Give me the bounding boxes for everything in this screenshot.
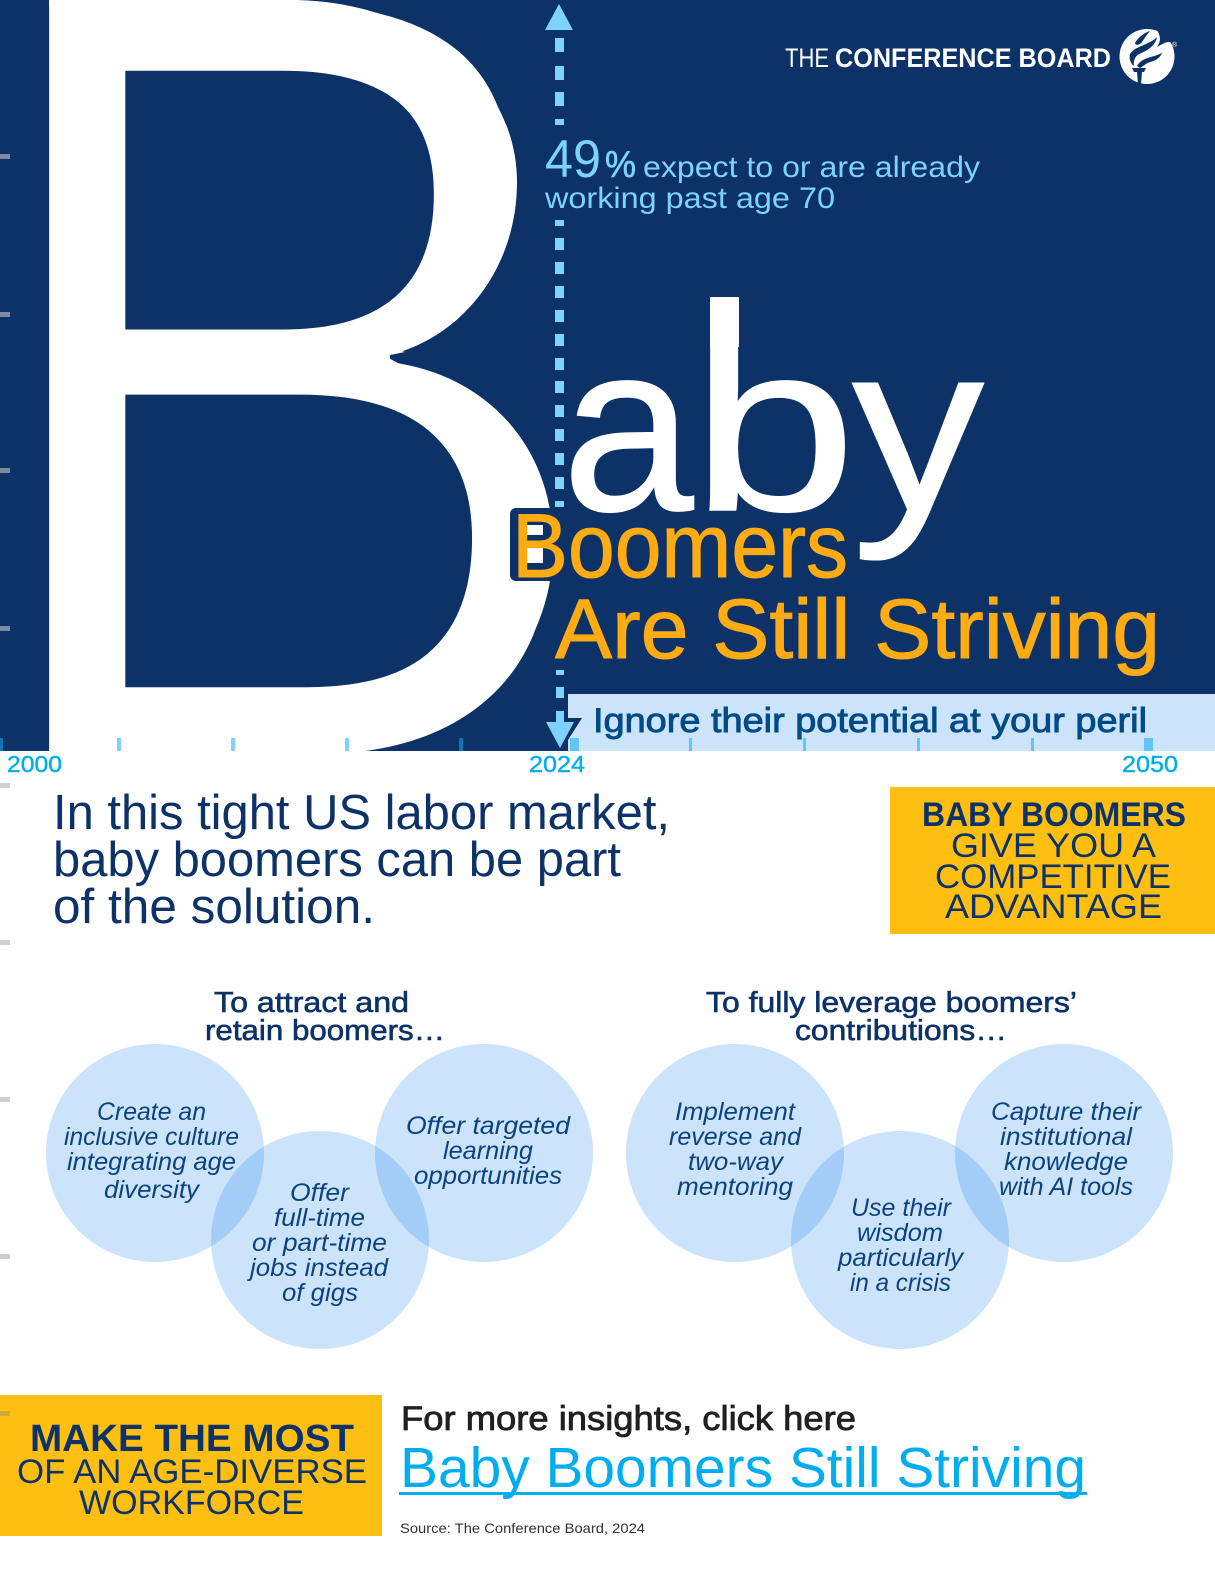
- circle text: institutional knowledge: institutional: [1000, 1123, 1134, 1151]
- title: aby: b: [691, 293, 857, 561]
- subheading: leverage contributions: To fully leverage boomers’: [706, 987, 1077, 1019]
- circle text: institutional knowledge: with AI tools: [999, 1173, 1133, 1201]
- timeline year labels: [7, 751, 1178, 777]
- circle text: inclusive culture: [64, 1098, 239, 1204]
- panel: navy hero: [0, 0, 1215, 751]
- link: Baby Boomers Still Striving: Baby Boomers Still Striving: [400, 1436, 1086, 1500]
- source note: Source: The Conference Board, 2024: [400, 1520, 645, 1536]
- heading: tight labor market: In this tight US labor market,: [53, 786, 670, 840]
- circle text: inclusive culture: diversity: [104, 1176, 201, 1204]
- callout: age-diverse workforce: WORKFORCE: [79, 1484, 304, 1522]
- circle text: mentoring: [669, 1098, 802, 1201]
- icon: torch emblem: [1120, 28, 1178, 84]
- circle text: targeted learning: opportunities: [414, 1162, 562, 1190]
- circle text: wisdom in a crisis: in a crisis: [850, 1269, 951, 1297]
- logo: The Conference Board: [785, 28, 1178, 84]
- subheading: attract and retain: To attract and: [214, 987, 409, 1019]
- title: aby: [562, 292, 984, 561]
- logo: The Conference Board: CONFERENCE BOARD: [835, 43, 1111, 73]
- circle text: flexible jobs: of gigs: [282, 1279, 358, 1307]
- circle text: mentoring: two-way: [688, 1148, 785, 1176]
- circle text: inclusive culture: integrating age: [67, 1148, 236, 1176]
- circle text: wisdom in a crisis: Use their: [851, 1194, 953, 1222]
- heading: tight labor market: [53, 786, 670, 934]
- giant letter B: [49, 0, 550, 751]
- circle text: inclusive culture: Create an: [97, 1098, 206, 1126]
- callout: age-diverse workforce: [0, 1395, 382, 1536]
- callout: competitive advantage: BABY BOOMERS: [922, 796, 1186, 834]
- timeline ticks: [0, 738, 1153, 751]
- callout: age-diverse workforce: MAKE THE MOST: [30, 1418, 354, 1460]
- circle text: flexible jobs: full-time: [274, 1204, 365, 1232]
- callout: competitive advantage: COMPETITIVE: [935, 858, 1171, 896]
- title: aby: a: [562, 292, 694, 561]
- statistic: 49% working past 70: %: [605, 144, 636, 185]
- logo: The Conference Board: THE: [785, 43, 829, 73]
- timeline year labels: 2050: [1122, 751, 1178, 777]
- title: aby: y: [852, 294, 984, 561]
- subheading: attract and retain: [205, 987, 445, 1047]
- callout: competitive advantage: [890, 787, 1215, 934]
- circle text: targeted learning: Offer targeted: [406, 1112, 571, 1140]
- heading: tight labor market: of the solution.: [53, 880, 375, 934]
- light blue tagline bar: [568, 694, 1215, 751]
- circle text: wisdom in a crisis: wisdom: [857, 1219, 943, 1247]
- title: Boomers with outlined B: Boomers: [512, 496, 848, 597]
- statistic: 49% working past 70: expect to or are already: [643, 151, 980, 184]
- circle text: inclusive culture: inclusive culture: [64, 1123, 239, 1151]
- circle text: flexible jobs: Offer: [290, 1179, 351, 1207]
- circle text: wisdom in a crisis: particularly: [837, 1244, 965, 1272]
- circle text: mentoring: mentoring: [677, 1173, 793, 1201]
- circle text: flexible jobs: jobs instead: [247, 1254, 389, 1282]
- light blue tagline bar: Ignore their potential at your peril: [593, 702, 1147, 740]
- callout: age-diverse workforce: OF AN AGE-DIVERSE: [17, 1453, 367, 1491]
- circle text: flexible jobs: or part-time: [252, 1229, 387, 1257]
- circle text: targeted learning: [406, 1112, 571, 1190]
- circle text: mentoring: reverse and: [669, 1123, 802, 1151]
- circle text: wisdom in a crisis: [837, 1194, 965, 1297]
- circle text: institutional knowledge: [991, 1098, 1143, 1201]
- subheading: leverage contributions: [706, 987, 1077, 1047]
- icon: torch emblem: ®: [1172, 41, 1178, 49]
- venn circles: attract and retain: [46, 1044, 593, 1349]
- left edge grey tick marks: [0, 154, 10, 1259]
- callout: competitive advantage: GIVE YOU A: [951, 827, 1156, 865]
- statistic: 49% working past 70: [544, 130, 980, 215]
- circle text: mentoring: Implement: [675, 1098, 796, 1126]
- timeline year labels: 2000: [7, 751, 62, 777]
- dashed arrow to 2024: [545, 4, 582, 751]
- statistic: 49% working past 70: working past age 70: [544, 182, 835, 215]
- text: more insights prompt: For more insights, click here: [401, 1400, 856, 1438]
- callout: competitive advantage: ADVANTAGE: [945, 888, 1162, 926]
- circle text: targeted learning: learning: [443, 1137, 533, 1165]
- title: Are Still Striving: Are Still Striving: [555, 582, 1160, 676]
- circle text: institutional knowledge: Capture their: [991, 1098, 1143, 1126]
- heading: tight labor market: baby boomers can be part: [53, 833, 621, 887]
- circle text: flexible jobs: [247, 1179, 389, 1307]
- circle text: institutional knowledge: knowledge: [1004, 1148, 1128, 1176]
- subheading: attract and retain: retain boomers…: [205, 1015, 445, 1047]
- timeline year labels: 2024: [529, 751, 585, 777]
- statistic: 49% working past 70: 49: [545, 130, 601, 189]
- venn circles: leverage: [626, 1044, 1173, 1349]
- subheading: leverage contributions: contributions…: [795, 1015, 1007, 1047]
